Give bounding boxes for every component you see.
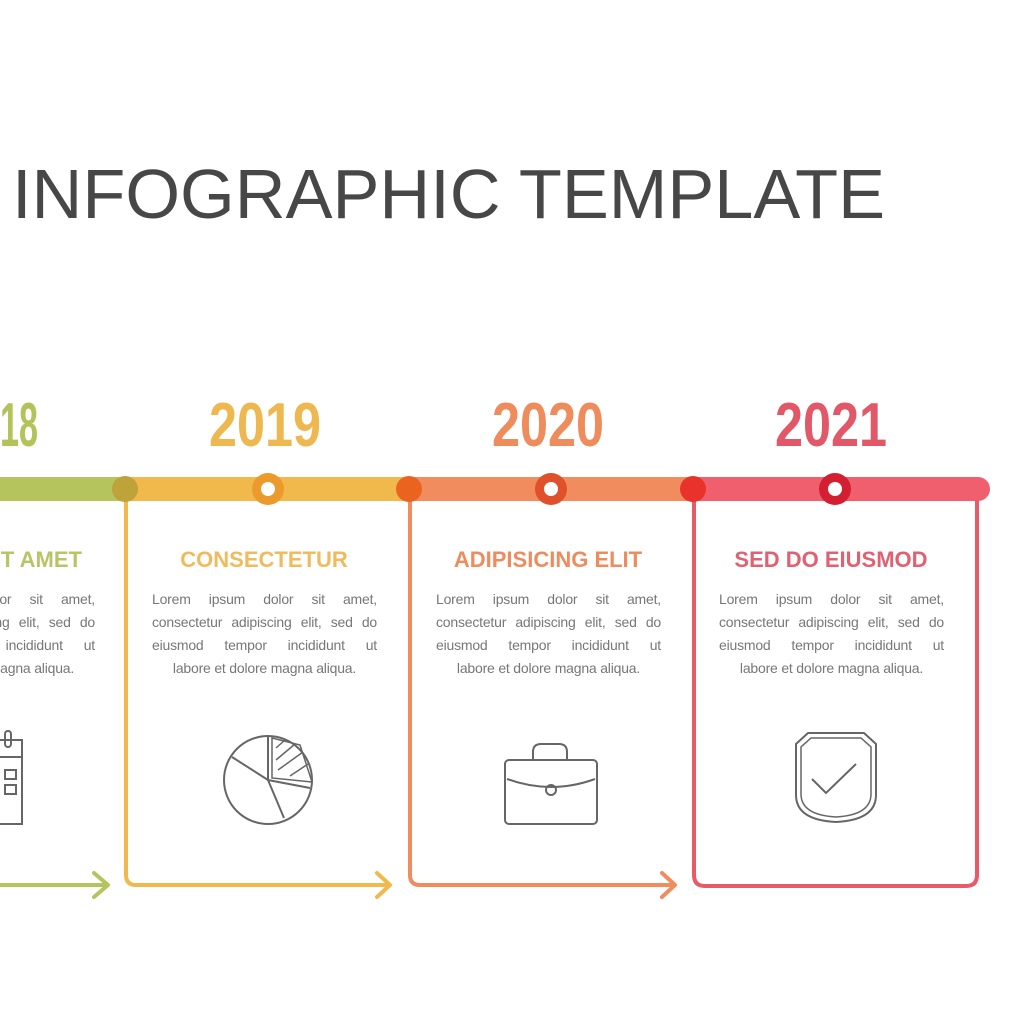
body text orange [436,591,662,676]
body text red: Lorem ipsum dolor sit amet, [719,591,944,607]
body text green [0,591,96,676]
arrow orange [662,873,675,897]
heading red: SED DO EIUSMOD [734,547,928,572]
year 2019: 2019 [209,391,321,460]
icon: calendar [0,731,22,824]
body text orange: consectetur adipiscing elit, sed do [436,614,661,630]
icon: pie chart [224,736,312,824]
body text red: eiusmod tempor incididunt ut [719,637,944,653]
box outline red [694,489,977,886]
bar segment orange [409,477,695,501]
bar segment green [0,477,130,501]
heading orange: ADIPISICING ELIT [454,547,643,572]
body text yellow: consectetur adipiscing elit, sed do [152,614,377,630]
body text red: consectetur adipiscing elit, sed do [719,614,944,630]
marker ring red [819,473,851,505]
box outline green [0,883,108,887]
marker ring orange [535,473,567,505]
box outline orange [410,489,675,885]
year 2020: 2020 [492,391,604,460]
junction dot olive [112,476,138,502]
timeline column: orange 2020 [396,391,695,897]
junction dot red [680,476,706,502]
timeline column: yellow 2019 [112,391,411,897]
timeline column: green 2018 [0,391,130,897]
body text red [719,591,944,676]
body text yellow: eiusmod tempor incididunt ut [152,637,377,653]
arrow yellow [377,873,390,897]
body text yellow: Lorem ipsum dolor sit amet, [152,591,377,607]
body text yellow: labore et dolore magna aliqua. [173,660,356,676]
heading yellow: CONSECTETUR [180,547,348,572]
icon: briefcase [505,744,597,824]
junction dot orange [396,476,422,502]
box outline yellow [126,489,390,885]
body text yellow [152,591,378,676]
bar segment yellow [125,477,411,501]
marker ring yellow [252,473,284,505]
bar segment red [693,477,990,501]
body text orange: eiusmod tempor incididunt ut [436,637,661,653]
body text orange: labore et dolore magna aliqua. [457,660,640,676]
timeline column: red 2021 [680,391,990,886]
title: INFOGRAPHIC TEMPLATE [12,155,885,233]
body text orange: Lorem ipsum dolor sit amet, [436,591,661,607]
icon: shield with check [796,733,876,822]
body text red: labore et dolore magna aliqua. [740,660,923,676]
arrow green [94,873,108,897]
year 2021: 2021 [775,391,887,460]
